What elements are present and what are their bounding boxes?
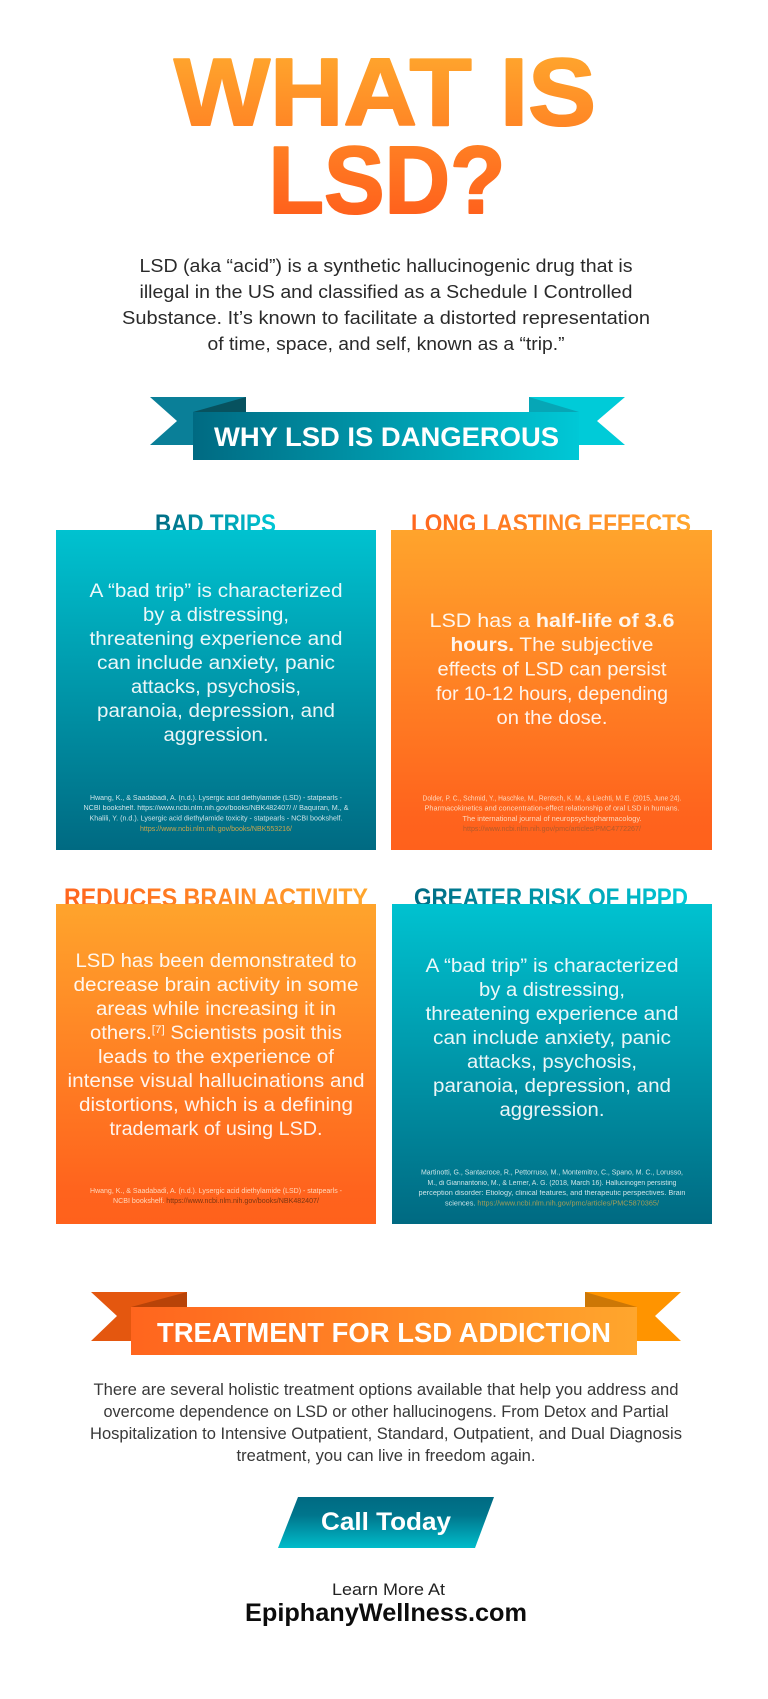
- panel: greater risk of HPPD: by a distressing,: [479, 980, 625, 1001]
- button: call today: [278, 1497, 494, 1548]
- panel: greater risk of HPPD: Martinotti, G., Santacroce, R., Pettorruso, M., Montemitro, C., Spano, M. C., Lorusso,: [421, 1170, 683, 1176]
- panel: greater risk of HPPD: perception disorder: Etiology, clinical features, and therapeutic perspectives. Brain: [418, 1190, 686, 1197]
- panel: long lasting effects: Dolder, P. C., Schmid, Y., Haschke, M., Rentsch, K. M., & Liechti, M. E. (2015, June 24).: [422, 796, 682, 802]
- panel: greater risk of HPPD: threatening experience and: [426, 1004, 678, 1025]
- intro paragraph: LSD (aka “acid”) is a synthetic hallucinogenic drug that is: [140, 255, 632, 276]
- panel: reduces brain activity: others.: [90, 1023, 148, 1044]
- panel: greater risk of HPPD: paranoia, depression, and: [433, 1076, 671, 1097]
- panel: greater risk of HPPD: can include anxiety, panic: [433, 1028, 671, 1049]
- banner: why LSD is dangerous: [150, 397, 625, 460]
- panel: reduces brain activity: [56, 884, 376, 1224]
- panel: bad trips: https://www.ncbi.nlm.nih.gov/books/NBK553216/: [140, 826, 292, 833]
- treatment paragraph: There are several holistic treatment options available that help you address and: [94, 1381, 678, 1399]
- panel: greater risk of HPPD: A “bad trip” is characterized: [426, 956, 678, 977]
- panel: bad trips: Hwang, K., & Saadabadi, A. (n.d.). Lysergic acid diethylamide (LSD) - statpearls -: [90, 795, 343, 802]
- panel: long lasting effects: The international journal of neuropsychopharmacology.: [462, 816, 642, 823]
- panel: bad trips: threatening experience and: [90, 629, 342, 650]
- panel: long lasting effects: LSD has a half-life of 3.6: [430, 611, 674, 632]
- panel: long lasting effects: hours. The subjective: [450, 635, 654, 656]
- button: call today: Call Today: [321, 1508, 451, 1536]
- panel: reduces brain activity: trademark of using LSD.: [110, 1119, 322, 1140]
- panel: long lasting effects: Pharmacokinetics and concentration-effect relationship of oral LSD in humans.: [424, 806, 680, 812]
- panel: greater risk of HPPD: attacks, psychosis,: [467, 1052, 637, 1073]
- panel: bad trips: aggression.: [164, 725, 268, 746]
- intro paragraph: [122, 255, 650, 354]
- panel: reduces brain activity: [7]: [152, 1024, 165, 1036]
- panel: greater risk of HPPD: [392, 884, 712, 1224]
- panel: long lasting effects: on the dose.: [496, 708, 608, 729]
- treatment paragraph: overcome dependence on LSD or other hallucinogens. From Detox and Partial: [104, 1403, 668, 1421]
- panel: reduces brain activity: Scientists posit this: [165, 1023, 342, 1044]
- panel: reduces brain activity: intense visual hallucinations and: [68, 1071, 364, 1092]
- treatment paragraph: treatment, you can live in freedom again.: [236, 1447, 536, 1465]
- panel: reduces brain activity: NCBI bookshelf. https://www.ncbi.nlm.nih.gov/books/NBK482407/: [113, 1198, 319, 1205]
- panel: long lasting effects: effects of LSD can persist: [438, 660, 667, 680]
- intro paragraph: of time, space, and self, known as a “trip.”: [208, 333, 564, 354]
- treatment paragraph: [90, 1381, 682, 1465]
- panel: long lasting effects: for 10-12 hours, depending: [436, 684, 668, 705]
- panel: reduces brain activity: LSD has been demonstrated to: [76, 951, 356, 972]
- title: [174, 39, 596, 234]
- panel: greater risk of HPPD: sciences. https://www.ncbi.nlm.nih.gov/pmc/articles/PMC5870365/: [445, 1200, 659, 1208]
- panel: bad trips: A “bad trip” is characterized: [90, 581, 342, 602]
- panel: greater risk of HPPD: GREATER RISK OF HPPD: [414, 884, 688, 912]
- banner: why LSD is dangerous: WHY LSD IS DANGEROUS: [214, 422, 559, 452]
- panel: bad trips: paranoia, depression, and: [97, 701, 335, 722]
- panel: long lasting effects: LONG LASTING EFFECTS: [411, 510, 691, 538]
- panel: bad trips: [56, 510, 376, 850]
- learn more footer: Learn More At: [332, 1580, 445, 1599]
- panel: bad trips: attacks, psychosis,: [131, 677, 301, 698]
- treatment paragraph: Hospitalization to Intensive Outpatient, Standard, Outpatient, and Dual Diagnosis: [90, 1425, 682, 1443]
- panel: bad trips: Khalili, Y. (n.d.). Lysergic acid diethylamide toxicity - statpearls - NCBI bookshelf.: [90, 816, 343, 822]
- learn more footer: EpiphanyWellness.com: [245, 1599, 527, 1627]
- title: WHAT IS: [174, 39, 596, 146]
- intro paragraph: illegal in the US and classified as a Schedule I Controlled: [140, 281, 632, 302]
- title: LSD?: [268, 127, 506, 234]
- panel: bad trips: BAD TRIPS: [155, 510, 276, 538]
- panel: reduces brain activity: leads to the experience of: [98, 1047, 335, 1068]
- banner: treatment for LSD addiction: TREATMENT FOR LSD ADDICTION: [157, 1317, 611, 1348]
- panel: reduces brain activity: REDUCES BRAIN ACTIVITY: [64, 884, 368, 912]
- panel: bad trips: by a distressing,: [143, 605, 289, 626]
- panel: bad trips: can include anxiety, panic: [97, 653, 335, 674]
- panel: reduces brain activity: Hwang, K., & Saadabadi, A. (n.d.). Lysergic acid diethylamide (LSD) - statpearls -: [90, 1188, 343, 1195]
- banner: treatment for LSD addiction: [91, 1292, 681, 1355]
- panel: long lasting effects: [391, 510, 712, 850]
- panel: greater risk of HPPD: M., di Giannantonio, M., & Lerner, A. G. (2018, March 16). Hallucinogen persisting: [428, 1180, 677, 1187]
- panel: bad trips: NCBI bookshelf. https://www.ncbi.nlm.nih.gov/books/NBK482407/ // Baquiran, M., &: [84, 805, 349, 812]
- panel: reduces brain activity: areas while increasing it in: [96, 999, 336, 1020]
- panel: reduces brain activity: decrease brain activity in some: [74, 975, 358, 996]
- panel: reduces brain activity: distortions, which is a defining: [79, 1095, 353, 1116]
- intro paragraph: Substance. It’s known to facilitate a distorted representation: [122, 307, 650, 328]
- learn more footer: [245, 1580, 527, 1627]
- panel: greater risk of HPPD: aggression.: [500, 1100, 604, 1121]
- panel: long lasting effects: https://www.ncbi.nlm.nih.gov/pmc/articles/PMC4772267/: [463, 826, 641, 833]
